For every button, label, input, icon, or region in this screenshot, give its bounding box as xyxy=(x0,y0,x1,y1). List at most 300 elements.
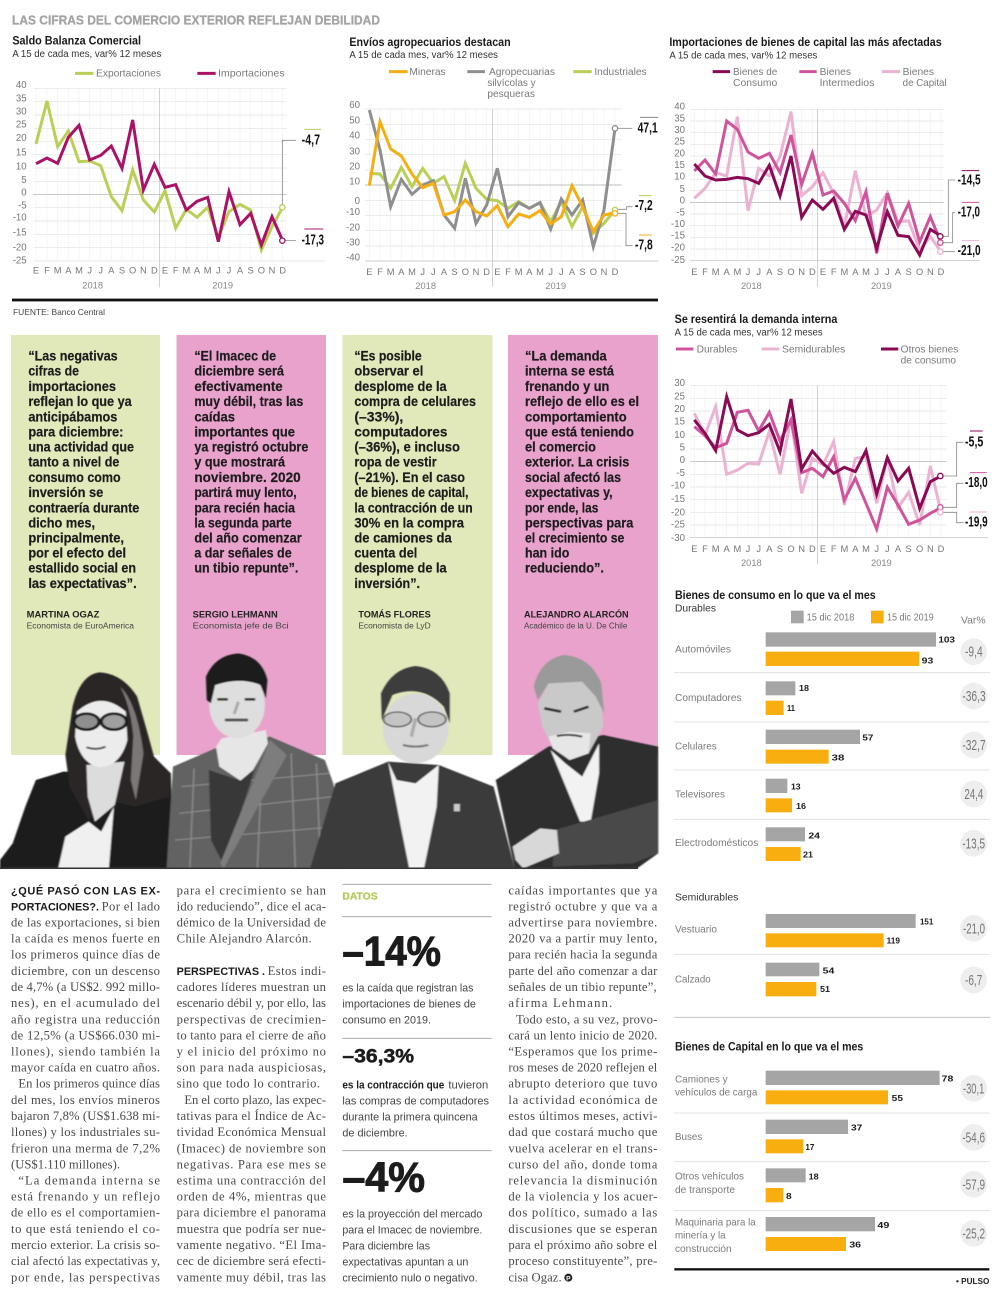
text column 4: Todo esto, a su vez, provo- xyxy=(516,1012,657,1026)
row: calzado: 51 xyxy=(820,984,830,994)
quote: Martina Ogaz: por el efecto del xyxy=(28,546,126,561)
text column 4: dos político, sumado a las xyxy=(508,1206,657,1220)
callout -18,0 xyxy=(938,473,988,510)
row: camiones: 55 xyxy=(892,1093,903,1103)
quote: Alejandro Alarcón: interna se está xyxy=(525,364,614,379)
y axis labels: 30 xyxy=(674,378,685,389)
row: vestuario: Vestuario xyxy=(675,925,717,936)
year 2019: 2019 xyxy=(871,281,892,291)
y axis labels: 30 xyxy=(16,107,27,118)
quote: Sergio Lehmann: y que mostrará xyxy=(194,455,285,470)
text column 1: llones), siendo también la xyxy=(11,1044,160,1058)
text column 1: los primeros quince días de xyxy=(11,948,160,962)
text column 4: la actividad económica de xyxy=(508,1093,658,1107)
text column 4: cará un lento inicio de 2020. xyxy=(508,1028,657,1042)
row: celulares: -32,7 xyxy=(962,738,986,754)
text column 2: muestra que podría ser nue- xyxy=(177,1222,326,1236)
row: camiones: vehículos de carga xyxy=(675,1088,758,1099)
text column 4: afirma Lehmann. xyxy=(508,996,612,1010)
legend: pesqueras xyxy=(487,89,535,100)
bar chart: calzado y bienes de capital xyxy=(674,954,990,1286)
y axis labels: -15 xyxy=(671,494,685,505)
legend: Semidurables xyxy=(782,344,846,355)
quote: Tomás Flores: observar el xyxy=(354,364,423,379)
text column 2: son para nada auspiciosas, xyxy=(177,1061,326,1075)
text column 2: tativas para el Índice de Ac- xyxy=(177,1109,326,1123)
text column 2: estima una contracción del xyxy=(177,1174,326,1188)
quote: Alejandro Alarcón xyxy=(524,349,639,631)
year 2019: 2019 xyxy=(545,281,566,291)
quote: Martina Ogaz: las expectativas”. xyxy=(28,576,137,591)
row: vestuario: -21,0 xyxy=(963,921,985,937)
text column 1: de 4,7% (a US$2. 992 millo- xyxy=(11,980,160,994)
text column 4: para recién hacia la segunda xyxy=(508,948,658,962)
text column 1: ¿QUÉ PASÓ CON LAS EX- xyxy=(11,884,160,897)
datos heading: DATOS xyxy=(342,891,378,902)
row: buses xyxy=(675,1120,987,1153)
year 2018: 2018 xyxy=(415,281,436,291)
callout -19,9: -19,9 xyxy=(965,514,988,530)
row: vestuario xyxy=(675,914,987,947)
y axis labels: 20 xyxy=(674,148,685,159)
line: bienes intermedios xyxy=(694,121,941,253)
text column 1: está frenando y un reflejo xyxy=(11,1190,160,1204)
row: maquinaria xyxy=(675,1217,987,1255)
year 2018: 2018 xyxy=(741,281,762,291)
quote: Martina Ogaz: contraería durante xyxy=(28,500,140,515)
y axis labels: 50 xyxy=(349,116,360,127)
text column 4: curso del año, donde toma xyxy=(508,1157,658,1171)
row: buses: -54,6 xyxy=(962,1130,985,1146)
quote: Martina Ogaz: cifras de xyxy=(28,364,79,379)
legend: 15 dic 2018 xyxy=(807,612,854,623)
legend xyxy=(389,67,647,100)
quote: Sergio Lehmann: caídas xyxy=(194,409,235,424)
legend: Bienes xyxy=(903,67,934,78)
row: televisores: 16 xyxy=(796,801,806,811)
chart heading: Saldo Balanza Comercial xyxy=(12,35,141,48)
y axis labels: -5 xyxy=(676,468,685,479)
legend: Durables xyxy=(697,344,738,355)
line: mineras xyxy=(369,122,615,232)
text column 4: cisa Ogaz. xyxy=(508,1270,562,1284)
text column 1: de las exportaciones, si bien xyxy=(11,915,161,929)
legend: 15 dic 2019 xyxy=(887,612,934,623)
stat text: para el Imacec de noviembre. xyxy=(342,1224,482,1236)
stat text: de diciembre. xyxy=(342,1128,408,1140)
stat text: tuvieron xyxy=(448,1079,488,1091)
quote: Alejandro Alarcón: “La demanda xyxy=(525,349,607,364)
var heading: Var% xyxy=(961,615,986,626)
text column 1: nes), en el acumulado del xyxy=(11,996,160,1010)
legend xyxy=(75,68,285,79)
y axis labels: -20 xyxy=(346,222,360,233)
legend xyxy=(676,344,959,366)
row: automóviles: 103 xyxy=(938,635,955,645)
source note: FUENTE: Banco Central xyxy=(13,307,105,317)
legend: Bienes xyxy=(820,67,851,78)
quote: Alejandro Alarcón: exterior. La crisis xyxy=(525,455,630,470)
text column 2: Chile Alejandro Alarcón. xyxy=(177,932,312,946)
row: otros vehículos: de transporte xyxy=(675,1185,735,1196)
quote: Tomás Flores: la contracción de un xyxy=(354,500,473,515)
text column 1: llones) y los industriales su- xyxy=(11,1125,160,1139)
quote: Tomás Flores xyxy=(354,349,476,631)
callout -7,8: -7,8 xyxy=(635,237,653,253)
y axis labels: -30 xyxy=(346,238,360,249)
y axis labels: 35 xyxy=(16,93,27,104)
y axis labels: 25 xyxy=(674,391,685,402)
row: maquinaria: 36 xyxy=(849,1240,861,1250)
legend: Bienes de xyxy=(733,67,777,78)
row: maquinaria: minería y la xyxy=(675,1231,726,1242)
text column 2: cec de diciembre será efecti- xyxy=(177,1254,326,1268)
callout -17,0: -17,0 xyxy=(958,205,980,221)
y axis labels: -5 xyxy=(676,207,685,218)
text column 2: vamente muy débil, tras las xyxy=(177,1270,326,1284)
row: celulares xyxy=(675,730,987,764)
name: ALEJANDRO ALARCÓN xyxy=(524,608,629,619)
line: bienes de capital xyxy=(694,112,941,252)
photo: portraits xyxy=(0,653,658,868)
y axis labels: 20 xyxy=(349,162,360,173)
bar chart heading: Bienes de consumo en lo que va el mes xyxy=(675,589,876,602)
row: camiones xyxy=(675,1071,987,1104)
row: vestuario: 151 xyxy=(920,916,933,926)
chart: Se resentirá la demanda interna xyxy=(671,313,988,568)
text column 2: perspectivas de crecimien- xyxy=(177,1012,326,1026)
callout 47,1 xyxy=(612,117,658,137)
text column 2: orden de 4%, mientras que xyxy=(177,1190,326,1204)
chart heading: Importaciones de bienes de capital las más afectadas xyxy=(669,36,942,49)
bienes de capital heading: Bienes de Capital en lo que va el mes xyxy=(675,1041,863,1054)
callout -4,7: -4,7 xyxy=(302,132,320,148)
quote: Sergio Lehmann: un tibio repunte”. xyxy=(194,561,298,576)
stat text: crecimiento nulo o negativo. xyxy=(342,1273,478,1285)
y axis labels: 5 xyxy=(21,175,27,186)
quote: Alejandro Alarcón: comportamiento xyxy=(525,409,627,424)
quote: Tomás Flores: desplome de la xyxy=(354,561,447,576)
text column 2: vamente negativo. “El Ima- xyxy=(177,1238,326,1252)
y axis labels: 0 xyxy=(21,187,27,198)
row: electrodomésticos: Electrodomésticos xyxy=(675,838,758,849)
text column 4: 2020 va a partir muy lento, xyxy=(508,932,657,946)
line: industriales xyxy=(369,163,615,233)
text column 2: y el inicio del próximo no xyxy=(177,1044,326,1058)
quote: Alejandro Alarcón: perspectivas para xyxy=(525,515,634,530)
callout -5,5 xyxy=(938,431,983,479)
quote: Tomás Flores: (–21%). En el caso xyxy=(354,470,465,485)
quote: Sergio Lehmann: ya registró octubre xyxy=(194,440,309,455)
row: maquinaria: Maquinaria para la xyxy=(675,1218,756,1229)
text column 2: En el corto plazo, las expec- xyxy=(184,1093,326,1107)
text column 4: dad que costará mucho que xyxy=(508,1125,658,1139)
y axis labels: -10 xyxy=(671,219,685,230)
legend: Agropecuarias xyxy=(489,67,555,78)
y axis labels: 30 xyxy=(349,146,360,157)
y axis labels: 25 xyxy=(16,120,27,131)
legend: Exportaciones xyxy=(96,68,161,79)
text column 2: para el crecimiento se han xyxy=(177,883,327,897)
text column 2: negativas. Para ese mes se xyxy=(177,1157,326,1171)
bar chart: bienes de consumo xyxy=(674,589,990,947)
panel: quote backgrounds xyxy=(11,335,658,755)
row: computadores: 18 xyxy=(799,683,809,693)
quote: Sergio Lehmann: “El Imacec de xyxy=(194,349,276,364)
quote: Alejandro Alarcón: que está teniendo xyxy=(525,424,634,439)
row: buses: 17 xyxy=(805,1142,814,1152)
text column 1: de 12,5% (a US$66.030 mi- xyxy=(11,1028,160,1042)
row: otros vehículos: Otros vehículos xyxy=(675,1172,744,1183)
callout -7,8 xyxy=(612,211,653,253)
stat -4%: –4% xyxy=(342,1154,425,1201)
quote: Alejandro Alarcón: frenando y un xyxy=(525,379,609,394)
year 2018: 2018 xyxy=(82,281,103,291)
legend xyxy=(713,67,947,89)
quote: Martina Ogaz: para diciembre: xyxy=(28,424,123,439)
row: celulares: 38 xyxy=(832,753,845,763)
callout -19,9 xyxy=(938,510,988,530)
stat text: Para diciembre las xyxy=(342,1241,430,1253)
stat text xyxy=(342,983,476,1027)
legend: Intermedios xyxy=(820,78,875,89)
legend: silvícolas y xyxy=(487,78,536,89)
text column 1: año registra una reducción xyxy=(11,1012,161,1026)
row: automóviles xyxy=(675,632,987,666)
y axis labels: -25 xyxy=(671,255,685,266)
callout -14,5: -14,5 xyxy=(958,172,981,188)
quote: Tomás Flores: “Es posible xyxy=(354,349,422,364)
quote: Martina Ogaz: una actividad que xyxy=(28,440,134,455)
quote: Alejandro Alarcón: social afectó las xyxy=(525,470,621,485)
legend: Mineras xyxy=(409,67,446,78)
text column 4: discusiones que se esperan xyxy=(508,1222,658,1236)
name: MARTINA OGAZ xyxy=(27,609,100,619)
y axis labels: 30 xyxy=(674,125,685,136)
role: Economista jefe de Bci xyxy=(193,622,289,631)
quote: Tomás Flores: inversión”. xyxy=(354,576,420,591)
quote: Alejandro Alarcón: han ido xyxy=(525,546,569,561)
text column 1: PORTACIONES?. xyxy=(11,901,99,913)
text column 4: para el próximo año sobre el xyxy=(508,1238,658,1252)
text column 4: proceso constituyente”, pre- xyxy=(508,1254,657,1268)
y axis labels: -30 xyxy=(671,533,685,544)
y axis labels: -15 xyxy=(671,231,685,242)
row: otros vehículos: 18 xyxy=(809,1171,819,1181)
text column 2: (Imacec) de noviembre son xyxy=(177,1141,327,1155)
stat text: consumo en 2019. xyxy=(342,1015,431,1027)
credit: Pulso: • PULSO xyxy=(956,1277,989,1286)
text column 4: señales de un tibio repunte”, xyxy=(508,980,657,994)
y axis labels: -10 xyxy=(346,207,360,218)
quote: Sergio Lehmann: efectivamente xyxy=(194,379,283,394)
chart subtitle: A 15 de cada mes, var% 12 meses xyxy=(675,327,823,338)
chart: Envíos agropecuarios destacan xyxy=(346,36,658,291)
quote: Alejandro Alarcón: por ende, las xyxy=(525,500,599,515)
stat text: importaciones de bienes de xyxy=(342,999,476,1011)
quote: Martina Ogaz: reflejan lo que ya xyxy=(28,394,132,409)
y axis labels: 10 xyxy=(349,177,360,188)
callout -14,5 xyxy=(938,171,981,239)
quote: Sergio Lehmann: del año comenzar xyxy=(194,530,302,545)
portrait: Alejandro Alarcón xyxy=(496,655,658,868)
stat text: es la proyección del mercado xyxy=(342,1208,482,1220)
text column 2: para diciembre el panorama xyxy=(177,1206,326,1220)
name: TOMÁS FLORES xyxy=(358,608,431,619)
x axis labels: EFMAMJJASONDEFMAMJJASOND xyxy=(366,267,619,277)
y axis labels xyxy=(671,101,685,266)
row: buses: 37 xyxy=(851,1122,863,1132)
text column 1: del mes, los envíos mineros xyxy=(11,1093,160,1107)
row: buses: Buses xyxy=(675,1132,703,1143)
text column 2: PERSPECTIVAS . xyxy=(177,966,265,978)
y axis labels: 0 xyxy=(680,455,685,466)
row: otros vehículos: -57,9 xyxy=(962,1177,985,1193)
callout -17,0 xyxy=(938,202,980,245)
text column 1: mayor caída en cuatro años. xyxy=(11,1061,160,1075)
quote: Sergio Lehmann: partirá muy lento, xyxy=(194,485,297,500)
legend xyxy=(791,611,934,623)
role: Economista de EuroAmerica xyxy=(27,622,135,631)
chart subtitle: A 15 de cada mes, var% 12 meses xyxy=(12,49,161,60)
portrait: Sergio Lehmann xyxy=(167,653,342,868)
quote: Sergio Lehmann: a dar señales de xyxy=(194,546,292,561)
stat text: es la caída que registran las xyxy=(342,983,474,995)
stat text: las compras de computadores xyxy=(342,1095,489,1107)
year 2019: 2019 xyxy=(871,558,892,568)
text column 4 xyxy=(508,883,658,1284)
quote: Sergio Lehmann: diciembre será xyxy=(194,364,284,379)
quote: Sergio Lehmann: importantes que xyxy=(194,424,295,439)
y axis labels: 25 xyxy=(674,137,685,148)
chart subtitle: A 15 de cada mes, var% 12 meses xyxy=(669,50,817,61)
text column 1: “La demanda interna se xyxy=(18,1174,160,1188)
text column 4: advertirse para noviembre. xyxy=(508,915,657,929)
callout -5,5: -5,5 xyxy=(965,434,983,450)
row: maquinaria: 49 xyxy=(877,1220,890,1230)
line: agropecuarias xyxy=(369,110,615,247)
quote: Sergio Lehmann xyxy=(193,349,309,631)
quote: Sergio Lehmann: para recién hacia xyxy=(194,500,295,515)
y axis labels: -15 xyxy=(13,227,27,238)
role: Académico de la U. De Chile xyxy=(524,622,628,631)
row: computadores: 11 xyxy=(787,703,795,713)
quote: Tomás Flores: desplome de la xyxy=(354,379,447,394)
text column 4: ros meses de 2020 reflejen el xyxy=(508,1061,658,1075)
quote: Martina Ogaz xyxy=(27,349,140,631)
quote: Alejandro Alarcón: expectativas y, xyxy=(525,485,613,500)
chart heading: Se resentirá la demanda interna xyxy=(675,313,838,326)
row: televisores xyxy=(675,779,987,812)
row: televisores: 24,4 xyxy=(964,787,983,803)
y axis labels: 35 xyxy=(674,113,685,124)
quote: Alejandro Alarcón: reflejo de ello es el xyxy=(525,394,639,409)
callout 47,1: 47,1 xyxy=(638,121,658,137)
row: computadores xyxy=(675,681,987,715)
text column 4: parte del año comenzar a dar xyxy=(508,964,658,978)
text column 2: ido reduciendo”, dice el aca- xyxy=(177,899,326,913)
row: maquinaria: construcción xyxy=(675,1244,732,1255)
y axis labels: 10 xyxy=(16,161,27,172)
y axis labels: 40 xyxy=(674,101,685,112)
legend: Otros bienes xyxy=(901,344,959,355)
stat text xyxy=(342,1208,482,1285)
text column 2: sino que todo lo contrario. xyxy=(177,1077,320,1091)
stat text: durante la primera quincena xyxy=(342,1112,479,1124)
stat -14%: –14% xyxy=(342,928,441,975)
x axis labels: EFMAMJJASONDEFMAMJJASOND xyxy=(691,267,945,277)
callout -21,0 xyxy=(938,241,981,259)
chart heading: Envíos agropecuarios destacan xyxy=(349,36,511,49)
row: electrodomésticos: -13,5 xyxy=(962,836,985,852)
text column 4: “Esperamos que los prime- xyxy=(508,1044,657,1058)
quote: Tomás Flores: de camiones da xyxy=(354,530,452,545)
row: calzado: -6,7 xyxy=(965,973,982,989)
legend: Importaciones xyxy=(218,68,285,79)
callout -7,2: -7,2 xyxy=(635,198,653,214)
name: SERGIO LEHMANN xyxy=(193,609,278,619)
y axis labels: 60 xyxy=(349,100,360,111)
y axis labels: -25 xyxy=(13,256,27,267)
line: exportaciones xyxy=(36,101,283,250)
row: maquinaria: -25,2 xyxy=(962,1226,985,1242)
legend: de Capital xyxy=(903,78,947,89)
main title: LAS CIFRAS DEL COMERCIO EXTERIOR REFLEJAN DEBILIDAD xyxy=(12,12,380,28)
row: calzado xyxy=(675,963,987,996)
text column 1: to que está teniendo el co- xyxy=(11,1222,160,1236)
x axis labels: EFMAMJJASONDEFMAMJJASOND xyxy=(691,544,945,554)
portrait: Martina Ogaz xyxy=(0,672,173,868)
sublabel semidurables: Semidurables xyxy=(675,892,739,903)
y axis labels: -5 xyxy=(18,201,27,212)
quote: Tomás Flores: (–36%), e incluso xyxy=(354,440,460,455)
quote: Alejandro Alarcón: el comercio xyxy=(525,440,596,455)
stat text: es la contracción que xyxy=(342,1079,444,1091)
y axis labels xyxy=(671,378,685,544)
text column 2: Estos indi- xyxy=(268,964,326,978)
y axis labels: 40 xyxy=(16,80,27,91)
row: electrodomésticos: 21 xyxy=(803,849,813,859)
line: bienes de consumo xyxy=(694,156,941,255)
portrait: Tomás Flores xyxy=(310,666,515,868)
y axis labels: -10 xyxy=(13,212,27,223)
row: automóviles: 93 xyxy=(922,655,934,665)
role: Economista de LyD xyxy=(358,622,431,631)
callout -21,0: -21,0 xyxy=(958,243,981,259)
quote: Alejandro Alarcón: el crecimiento se xyxy=(525,530,625,545)
text column 4: vuelva acelerar en el trans- xyxy=(508,1141,657,1155)
row: computadores: -36,3 xyxy=(962,689,986,705)
y axis labels: 10 xyxy=(674,172,685,183)
y axis labels: 0 xyxy=(680,196,685,207)
quote: Martina Ogaz: dicho mes, xyxy=(28,515,95,530)
quote: Martina Ogaz: consumo como xyxy=(28,470,121,485)
stat -36,3%: –36,3% xyxy=(342,1046,414,1067)
y axis labels: 15 xyxy=(16,147,27,158)
y axis labels xyxy=(13,80,27,267)
legend: Industriales xyxy=(594,67,647,78)
quote: Tomás Flores: 30% en la compra xyxy=(354,515,464,530)
sublabel durables: Durables xyxy=(675,604,716,615)
quote: Martina Ogaz: estallido social en xyxy=(28,561,136,576)
quote: Tomás Flores: de bienes de capital, xyxy=(354,485,468,500)
y axis labels: -20 xyxy=(671,507,685,518)
y axis labels: -40 xyxy=(346,252,360,263)
text column 2: to tanto para el cierre de año xyxy=(177,1028,326,1042)
row: otros vehículos: 8 xyxy=(786,1191,792,1201)
divider under top charts xyxy=(12,299,658,301)
text column 1 xyxy=(11,884,161,1284)
